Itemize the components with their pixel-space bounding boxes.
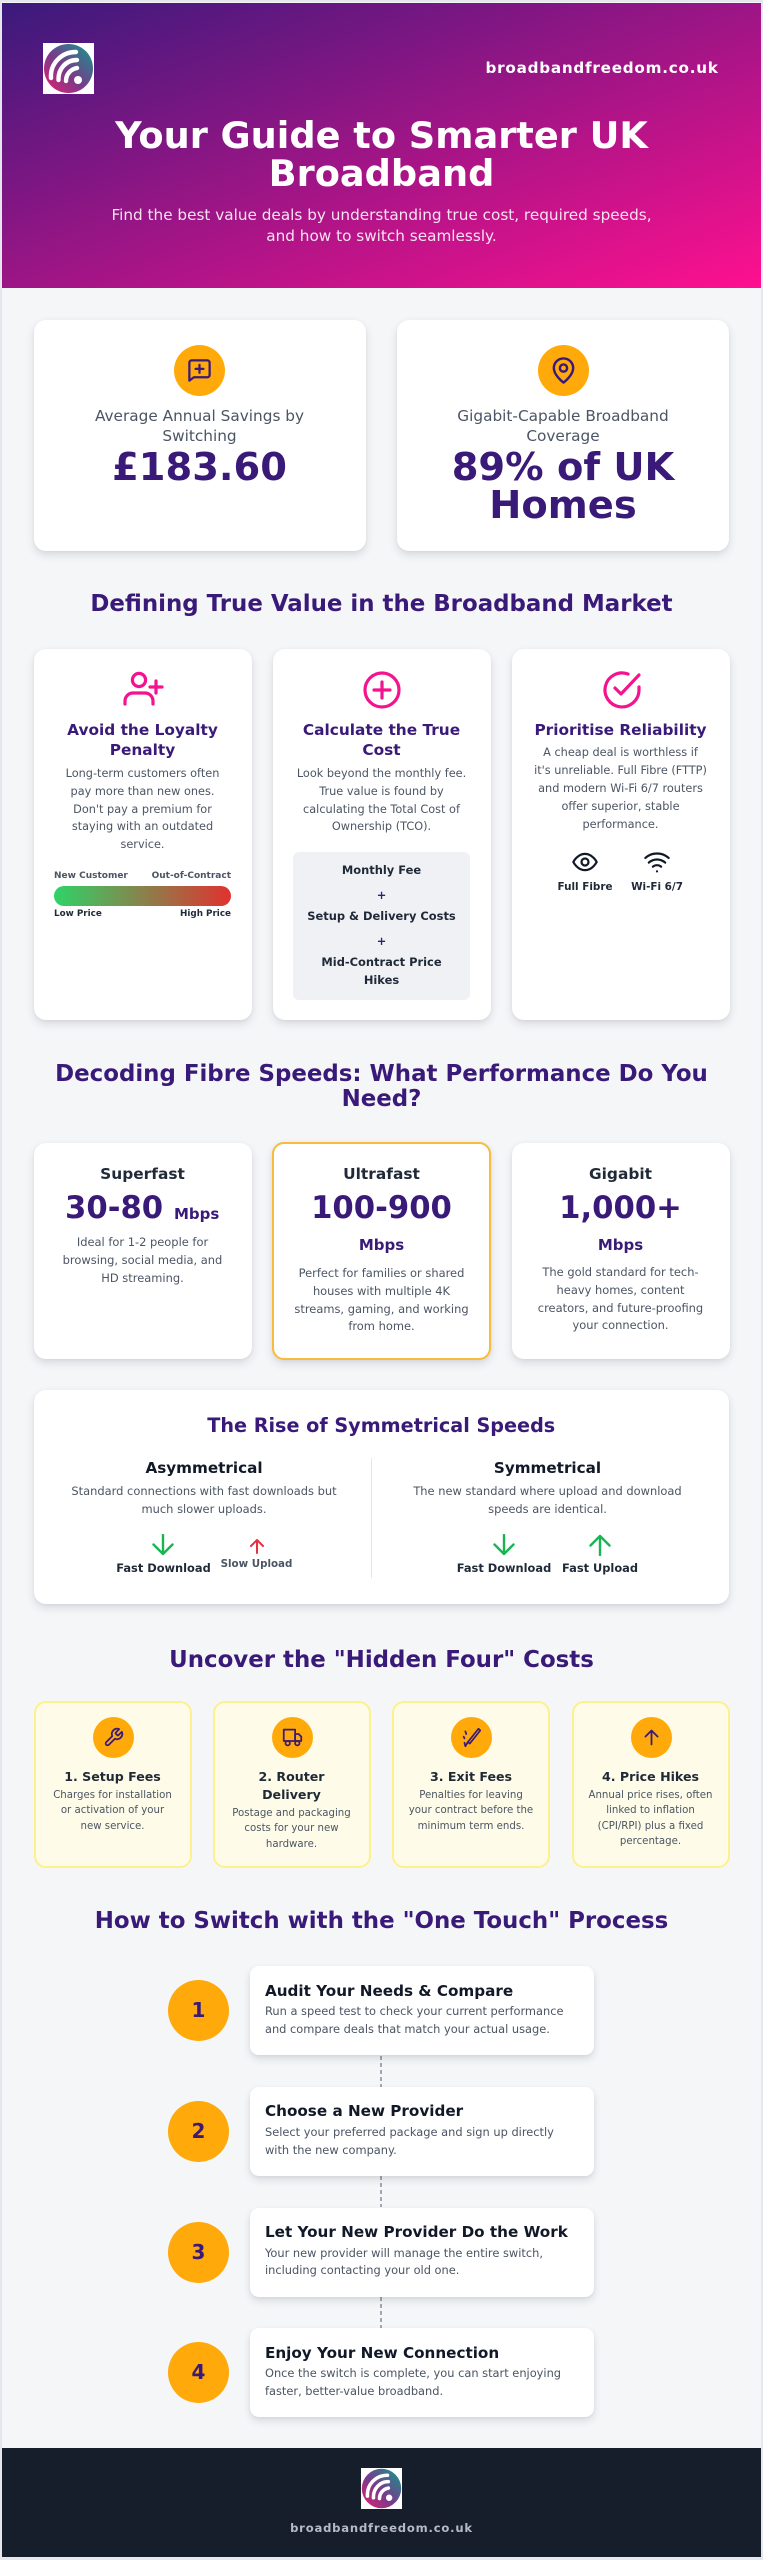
text: or activation of your	[61, 1805, 164, 1816]
icon: wifi	[644, 852, 670, 872]
icon: wrench	[92, 1717, 134, 1758]
label: Switching	[162, 427, 237, 445]
description: houses with multiple 4K	[313, 1284, 450, 1298]
title	[114, 114, 649, 195]
icon: plus circle	[363, 671, 401, 709]
step text: Run a speed test to check your current performance	[265, 2004, 564, 2018]
connector	[380, 2297, 382, 2328]
title	[258, 1769, 325, 1802]
step number	[168, 2222, 229, 2283]
step card	[250, 2328, 594, 2417]
bar top labels	[54, 871, 231, 881]
value	[452, 445, 676, 528]
heading: true value: Defining True Value in the Broadband Market	[90, 591, 673, 617]
icon: check circle	[603, 671, 641, 708]
mid-contract hikes: Hikes	[364, 973, 399, 987]
mid-contract hikes	[321, 955, 442, 987]
subtitle: and how to switch seamlessly.	[266, 227, 497, 245]
text: (CPI/RPI) plus a fixed	[598, 1821, 703, 1832]
text	[534, 746, 707, 831]
heading	[303, 721, 460, 759]
column text: much slower uploads.	[142, 1502, 266, 1516]
step text: Select your preferred package and sign up directly	[265, 2125, 554, 2139]
heading: Cost	[362, 741, 401, 759]
label: Coverage	[526, 427, 600, 445]
text	[297, 767, 466, 833]
description: Perfect for families or shared	[299, 1266, 464, 1280]
subtitle: Find the best value deals by understanding true cost, required speeds,	[111, 206, 652, 224]
bar top labels: Out-of-Contract	[152, 871, 231, 881]
column: symmetrical	[413, 1459, 682, 1575]
bar bottom labels: High Price	[180, 909, 231, 919]
description: from home.	[348, 1319, 415, 1333]
heading: hidden costs: Uncover the "Hidden Four" Costs	[169, 1647, 594, 1673]
title: 3. Exit Fees	[430, 1769, 512, 1784]
tier name: Superfast	[100, 1165, 185, 1183]
step number	[168, 2342, 229, 2403]
text: Annual price rises, often	[588, 1790, 712, 1801]
text: costs for your new	[244, 1823, 339, 1834]
text: calculating the Total Cost of	[303, 803, 460, 816]
description: your connection.	[572, 1318, 668, 1332]
label: fast upload: Fast Upload	[562, 1561, 638, 1575]
text: Postage and packaging	[232, 1808, 351, 1819]
heading: Avoid the Loyalty	[67, 721, 218, 739]
footer website name: broadbandfreedom.co.uk	[290, 2521, 473, 2535]
plus: +	[377, 888, 386, 902]
title: Broadband	[269, 152, 494, 195]
step text	[265, 2124, 554, 2160]
arrow: fast download	[493, 1534, 515, 1556]
text: Charges for installation	[53, 1790, 172, 1801]
speed value: 1,000+	[559, 1191, 682, 1226]
step 3	[168, 2208, 594, 2297]
stat card: coverage	[397, 320, 729, 551]
text: offer superior, stable	[561, 800, 680, 813]
mid-contract hikes: Mid-Contract Price	[321, 955, 442, 969]
heading	[67, 721, 218, 759]
plus: +	[377, 934, 386, 948]
description: Ideal for 1-2 people for	[77, 1235, 208, 1249]
column text: speeds are identical.	[488, 1502, 607, 1516]
step text: and compare deals that match your actual usage.	[265, 2022, 550, 2036]
heading: Calculate the True	[303, 721, 460, 739]
text: and modern Wi-Fi 6/7 routers	[538, 782, 703, 795]
description: The gold standard for tech-	[542, 1265, 699, 1279]
text	[53, 1790, 172, 1832]
text: Penalties for leaving	[419, 1790, 523, 1801]
column: asymmetrical	[71, 1459, 337, 1575]
text: your contract before the	[409, 1805, 533, 1816]
speed card: gigabit	[512, 1143, 730, 1359]
text: Ownership (TCO).	[332, 820, 431, 833]
footer logo	[361, 2468, 402, 2509]
heading: fibre speeds: Decoding Fibre Speeds: What Performance Do You	[55, 1060, 708, 1086]
title: 2. Router	[258, 1769, 325, 1784]
card: reliability	[512, 649, 730, 1020]
step number: 2	[192, 2119, 205, 2143]
bar bottom labels	[54, 909, 231, 919]
bar bottom labels: Low Price	[54, 909, 102, 919]
step title: Choose a New Provider	[265, 2102, 463, 2120]
step title: Enjoy Your New Connection	[265, 2344, 499, 2362]
unit: Mbps	[174, 1205, 219, 1223]
step card	[250, 2208, 594, 2297]
header banner	[2, 3, 761, 288]
description	[63, 1235, 222, 1285]
step number: 3	[192, 2240, 205, 2264]
speed card: ultrafast	[272, 1142, 491, 1360]
text: hardware.	[266, 1839, 317, 1850]
heading: one touch process: How to Switch with the "One Touch" Process	[95, 1908, 668, 1934]
cost card: price hikes	[572, 1701, 730, 1868]
heading: Penalty	[110, 741, 175, 759]
text: performance.	[583, 818, 658, 831]
column heading: Symmetrical	[494, 1459, 601, 1477]
step text	[265, 2245, 543, 2280]
connector	[380, 2176, 382, 2207]
step 1	[168, 1966, 596, 2061]
value: £183.60	[112, 445, 287, 490]
step card	[250, 1966, 594, 2055]
icon: arrow up	[630, 1717, 672, 1758]
text: staying with an outdated	[72, 820, 213, 833]
step text: faster, better-value broadband.	[265, 2384, 443, 2398]
step text	[265, 2004, 564, 2036]
label: slow upload: Slow Upload	[221, 1558, 292, 1570]
speed card: superfast	[34, 1143, 252, 1359]
step number: 4	[192, 2360, 205, 2384]
text	[232, 1808, 351, 1850]
step 4	[168, 2328, 594, 2417]
monthly fee: Monthly Fee	[342, 863, 421, 877]
text: it's unreliable. Full Fibre (FTTP)	[534, 764, 707, 777]
value: Homes	[489, 483, 637, 528]
icon: truck	[272, 1717, 312, 1758]
cost card: exit fees	[392, 1701, 550, 1868]
icon: scissors	[451, 1717, 492, 1758]
tier name: Gigabit	[589, 1165, 652, 1183]
column heading: Asymmetrical	[145, 1459, 263, 1477]
speed value: 100-900	[311, 1191, 452, 1226]
arrow: fast upload	[589, 1534, 611, 1556]
label: fast download: Fast Download	[116, 1561, 211, 1575]
step number: 1	[192, 1998, 205, 2022]
description: creators, and future-proofing	[538, 1301, 703, 1315]
logo	[43, 43, 94, 94]
heading: fibre speeds: Need?	[342, 1086, 421, 1112]
step title: Audit Your Needs & Compare	[265, 1982, 513, 2000]
heading: Prioritise Reliability	[534, 721, 707, 739]
icon: user plus	[123, 672, 164, 706]
step title: Let Your New Provider Do the Work	[265, 2223, 568, 2241]
label: Gigabit-Capable Broadband	[457, 407, 669, 425]
unit: Mbps	[359, 1236, 404, 1254]
step text: Your new provider will manage the entire switch,	[265, 2246, 543, 2260]
text	[66, 767, 219, 851]
bar top labels: New Customer	[54, 871, 128, 881]
step text: with the new company.	[265, 2143, 397, 2157]
panel: symmetrical speeds	[34, 1390, 729, 1604]
step number	[168, 1980, 229, 2041]
price gradient bar	[54, 871, 231, 919]
text: A cheap deal is worthless if	[543, 746, 698, 759]
icon: eye	[572, 852, 598, 872]
arrow: slow upload	[250, 1539, 264, 1554]
speed value: 30-80	[65, 1191, 163, 1226]
label: Average Annual Savings by	[95, 407, 304, 425]
description: HD streaming.	[101, 1271, 184, 1285]
label: fast download: Fast Download	[457, 1561, 551, 1575]
heading: fibre speeds	[55, 1060, 708, 1112]
step text: Once the switch is complete, you can start enjoying	[265, 2366, 561, 2380]
text: Long-term customers often	[66, 767, 219, 780]
text: True value is found by	[319, 785, 444, 798]
text: pay more than new ones.	[71, 785, 214, 798]
title: Your Guide to Smarter UK	[115, 114, 648, 157]
label: wifi: Wi-Fi 6/7	[631, 881, 683, 893]
text	[588, 1790, 712, 1847]
column text	[413, 1484, 682, 1516]
arrow: fast download	[152, 1534, 174, 1556]
text: linked to inflation	[606, 1805, 695, 1816]
description: browsing, social media, and	[63, 1253, 222, 1267]
step text: including contacting your old one.	[265, 2263, 459, 2277]
label	[95, 407, 304, 445]
title: 4. Price Hikes	[602, 1769, 699, 1784]
bar	[54, 886, 231, 906]
cost card: router delivery	[212, 1701, 370, 1868]
cost card: setup fees	[34, 1701, 192, 1868]
card: true cost	[272, 649, 490, 1020]
value: 89% of UK	[452, 445, 674, 490]
column text: Standard connections with fast downloads but	[71, 1484, 337, 1498]
panel heading: The Rise of Symmetrical Speeds	[207, 1414, 555, 1437]
icon: message plus	[174, 345, 225, 396]
icon: map pin	[538, 345, 588, 396]
text: percentage.	[620, 1836, 681, 1847]
step card	[250, 2087, 594, 2176]
card: loyalty penalty	[34, 649, 252, 1020]
column text	[71, 1484, 337, 1516]
unit: Mbps	[598, 1236, 643, 1254]
cost formula box	[293, 852, 470, 1000]
description	[294, 1266, 469, 1333]
text	[409, 1790, 533, 1832]
label: full fibre: Full Fibre	[558, 881, 612, 893]
stat card: savings	[34, 320, 366, 551]
step 2	[168, 2087, 596, 2182]
description	[538, 1265, 703, 1332]
connector	[380, 2056, 382, 2086]
title: 1. Setup Fees	[64, 1769, 161, 1784]
step text	[265, 2365, 561, 2401]
text: Look beyond the monthly fee.	[297, 767, 466, 780]
label	[457, 407, 669, 445]
text: minimum term ends.	[418, 1821, 524, 1832]
title: Delivery	[262, 1787, 321, 1802]
website name: broadbandfreedom.co.uk	[486, 59, 719, 77]
column text: The new standard where upload and download	[413, 1484, 682, 1498]
subtitle	[111, 206, 652, 245]
text: service.	[120, 838, 165, 851]
step number	[168, 2101, 229, 2162]
text: new service.	[80, 1821, 145, 1832]
setup costs: Setup & Delivery Costs	[307, 909, 456, 923]
text: Don't pay a premium for	[73, 803, 212, 816]
tier name: Ultrafast	[343, 1165, 420, 1183]
description: streams, gaming, and working	[294, 1302, 469, 1316]
divider	[370, 1458, 372, 1578]
footer	[2, 2448, 761, 2557]
description: heavy homes, content	[557, 1283, 684, 1297]
